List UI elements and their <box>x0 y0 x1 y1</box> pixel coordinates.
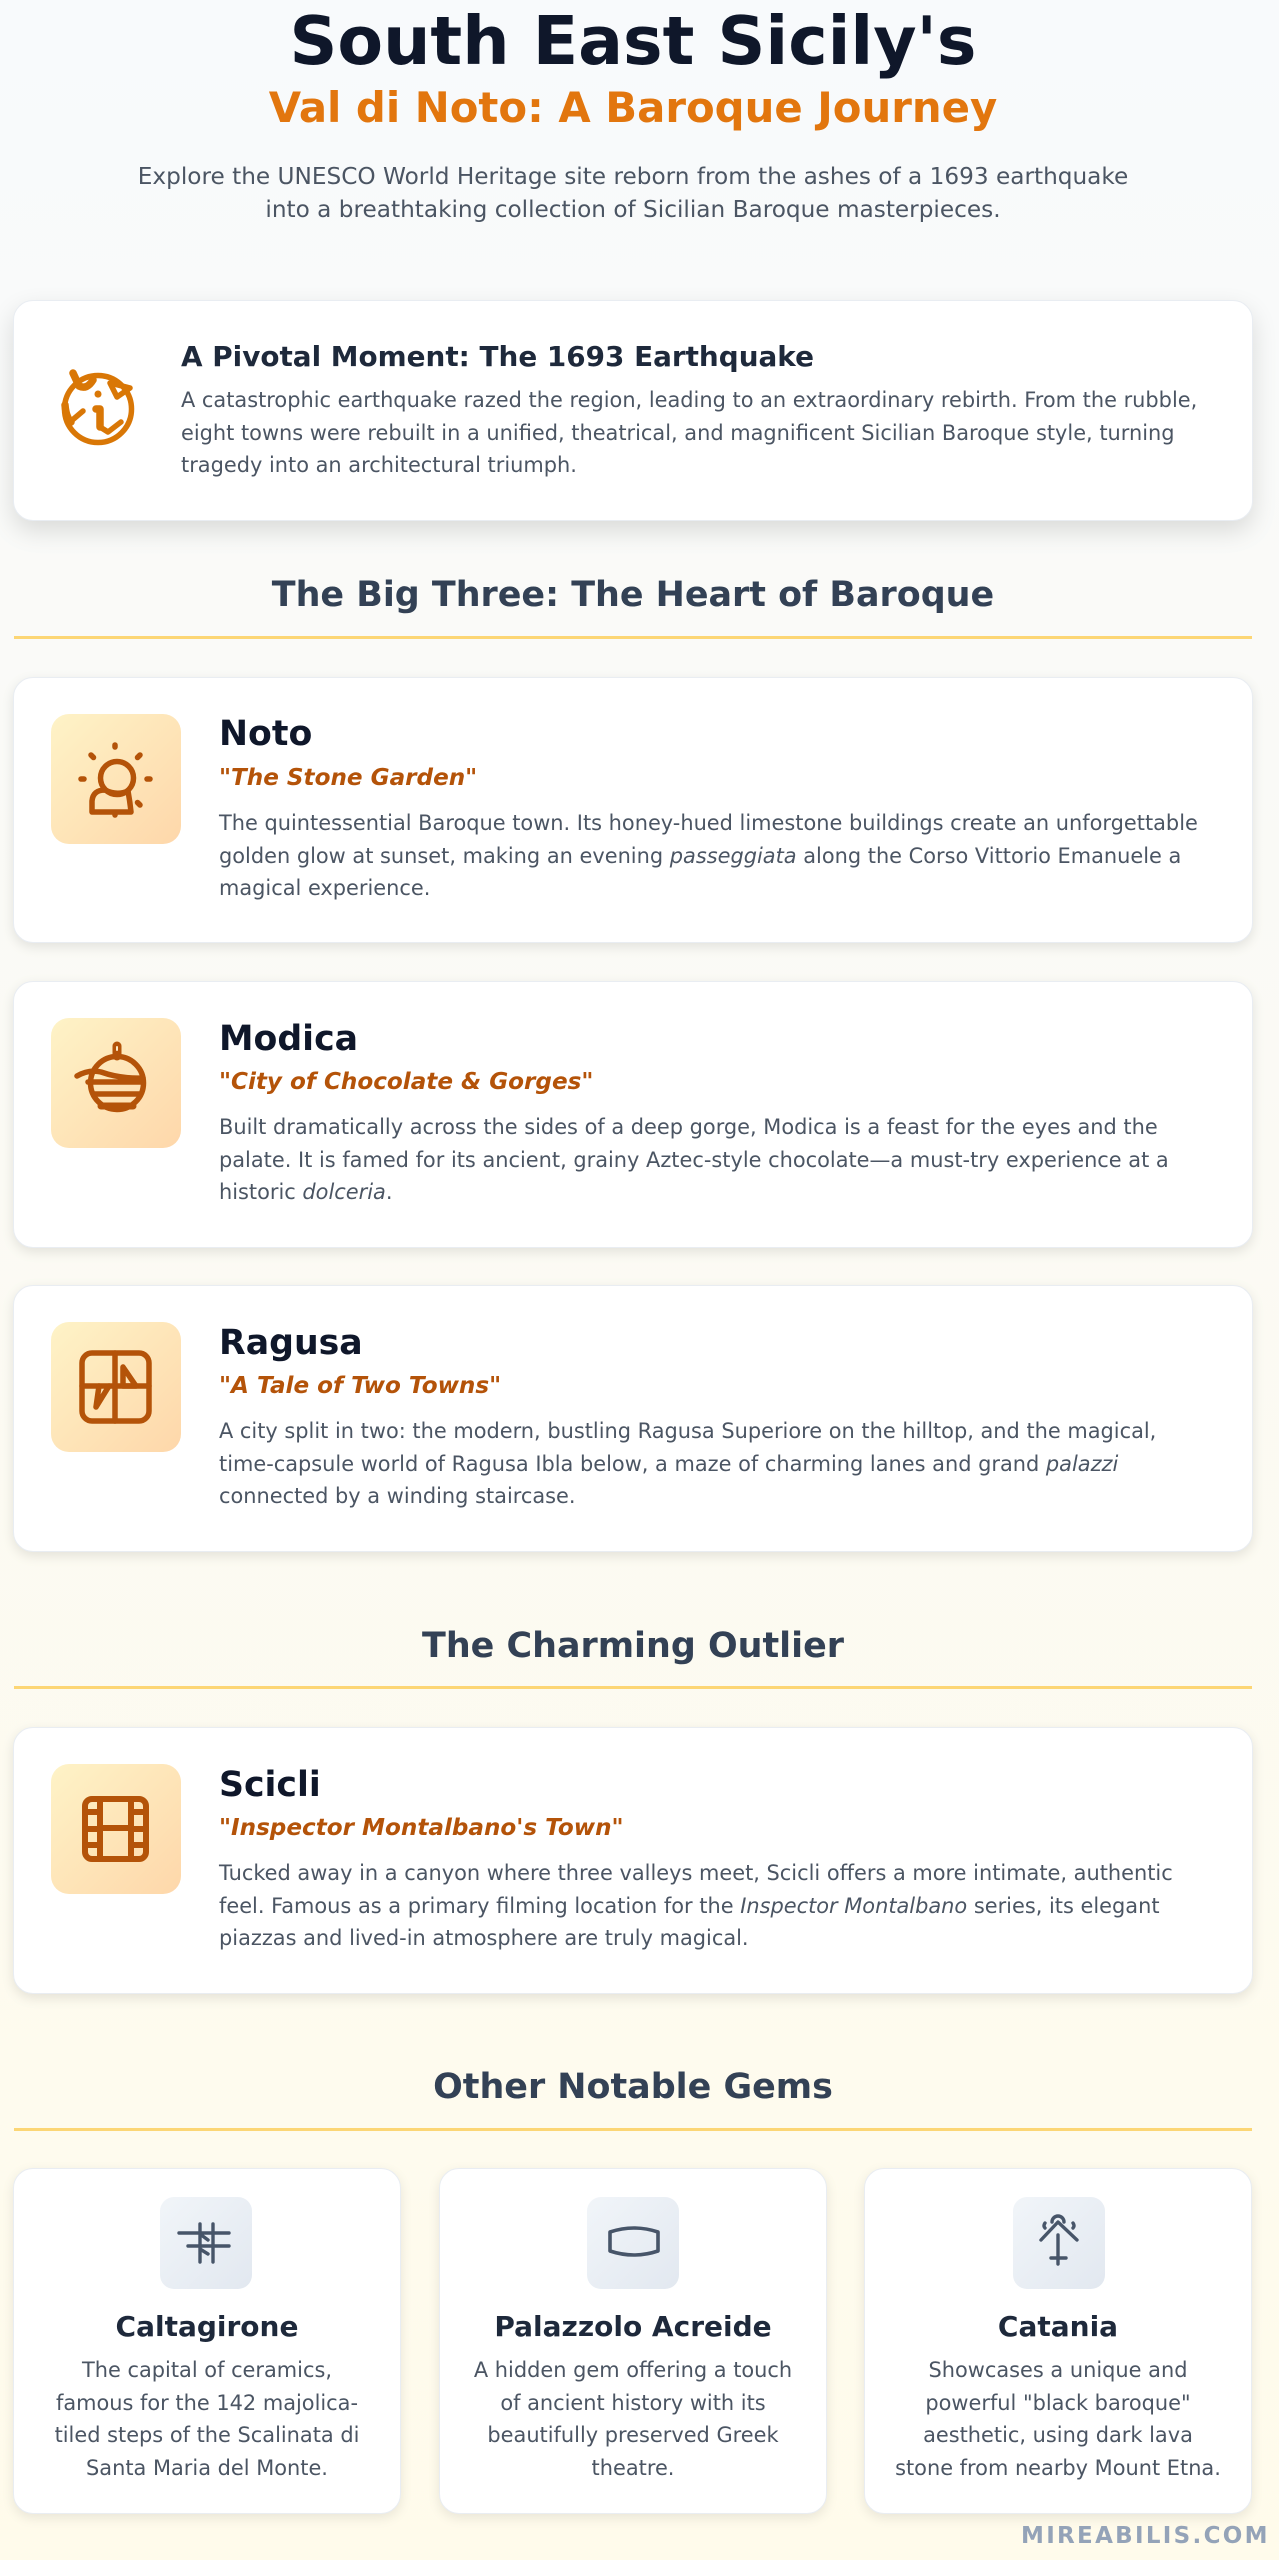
description: palate. It is famed for its ancient, grainy Aztec-style chocolate—a must-try experience at a <box>219 1148 1169 1172</box>
description: beautifully preserved Greek <box>487 2423 779 2447</box>
icon: theatre <box>587 2197 679 2289</box>
panel: Scicli <box>13 1727 1253 1994</box>
description: magical experience. <box>219 876 430 900</box>
icon: split map <box>51 1322 181 1452</box>
icon: cracked globe <box>61 369 134 446</box>
description <box>218 1861 1173 1950</box>
town name: Palazzolo Acreide <box>494 2310 772 2343</box>
intro text: Explore the UNESCO World Heritage site reborn from the ashes of a 1693 earthquake <box>138 163 1128 190</box>
icon: sun and bell <box>51 714 181 844</box>
panel: earthquake callout <box>13 300 1253 521</box>
description: time-capsule world of Ragusa Ibla below, a maze of charming lanes and grand palazzi <box>219 1452 1118 1476</box>
heading: other notable gems: Other Notable Gems <box>433 2067 833 2107</box>
panel: Modica <box>13 981 1253 1248</box>
card text: tragedy into an architectural triumph. <box>181 453 577 477</box>
description: connected by a winding staircase. <box>219 1484 576 1508</box>
description: famous for the 142 majolica- <box>56 2391 358 2415</box>
panel: Catania <box>864 2168 1252 2514</box>
description <box>474 2358 792 2480</box>
intro text: into a breathtaking collection of Sicilian Baroque masterpieces. <box>265 196 1001 223</box>
description: tiled steps of the Scalinata di <box>55 2423 359 2447</box>
panel: Noto <box>13 677 1253 943</box>
subtitle: Val di Noto: A Baroque Journey <box>269 83 997 132</box>
title: South East Sicily's <box>289 2 976 80</box>
description: of ancient history with its <box>500 2391 766 2415</box>
description: stone from nearby Mount Etna. <box>895 2456 1221 2480</box>
icon: tiled grid <box>160 2197 252 2289</box>
description <box>55 2358 359 2480</box>
description: piazzas and lived-in atmosphere are truly magical. <box>219 1926 749 1950</box>
tagline: "Inspector Montalbano's Town" <box>219 1815 624 1841</box>
heading: the big three: The Big Three: The Heart of Baroque <box>272 575 994 615</box>
description: feel. Famous as a primary filming location for the Inspector Montalbano series, its elegant <box>219 1894 1160 1918</box>
description: Santa Maria del Monte. <box>86 2456 328 2480</box>
town name: Ragusa <box>219 1323 363 1363</box>
heading: the charming outlier: The Charming Outlier <box>422 1626 844 1666</box>
watermark: MIREABILIS.COM <box>1021 2523 1270 2549</box>
town name: Caltagirone <box>116 2310 298 2343</box>
description <box>895 2358 1221 2480</box>
panel: Caltagirone <box>13 2168 401 2514</box>
description: aesthetic, using dark lava <box>923 2423 1193 2447</box>
town name: Catania <box>998 2310 1118 2343</box>
icon: film strip <box>51 1764 181 1894</box>
town name: Scicli <box>219 1765 321 1805</box>
icon: volcano cross <box>1013 2197 1105 2289</box>
description <box>218 811 1198 900</box>
icon: chocolate bulb <box>51 1018 181 1148</box>
description: historic dolceria. <box>219 1180 392 1204</box>
description: Tucked away in a canyon where three valleys meet, Scicli offers a more intimate, authentic <box>219 1861 1173 1885</box>
tagline: "The Stone Garden" <box>219 765 477 791</box>
tagline: "City of Chocolate & Gorges" <box>219 1069 593 1095</box>
tagline: "A Tale of Two Towns" <box>219 1373 501 1399</box>
description: A city split in two: the modern, bustling Ragusa Superiore on the hilltop, and the magical, <box>219 1419 1156 1443</box>
description: The capital of ceramics, <box>82 2358 332 2382</box>
description: The quintessential Baroque town. Its honey-hued limestone buildings create an unforgettable <box>219 811 1198 835</box>
intro text <box>138 163 1128 223</box>
panel: Ragusa <box>13 1285 1253 1552</box>
card text: A catastrophic earthquake razed the region, leading to an extraordinary rebirth. From the rubble, <box>181 388 1197 412</box>
panel: Palazzolo Acreide <box>439 2168 827 2514</box>
description: Showcases a unique and <box>929 2358 1187 2382</box>
description <box>219 1419 1156 1508</box>
description: powerful "black baroque" <box>925 2391 1191 2415</box>
description: A hidden gem offering a touch <box>474 2358 792 2382</box>
description: theatre. <box>592 2456 674 2480</box>
description <box>219 1115 1169 1204</box>
town name: Modica <box>219 1019 358 1059</box>
description: Built dramatically across the sides of a deep gorge, Modica is a feast for the eyes and the <box>219 1115 1158 1139</box>
card text: eight towns were rebuilt in a unified, theatrical, and magnificent Sicilian Baroque style, turning <box>181 421 1175 445</box>
card heading: A Pivotal Moment: The 1693 Earthquake <box>181 340 814 373</box>
town name: Noto <box>219 714 312 754</box>
description: golden glow at sunset, making an evening passeggiata along the Corso Vittorio Emanuele a <box>219 844 1181 868</box>
card text <box>181 388 1197 477</box>
